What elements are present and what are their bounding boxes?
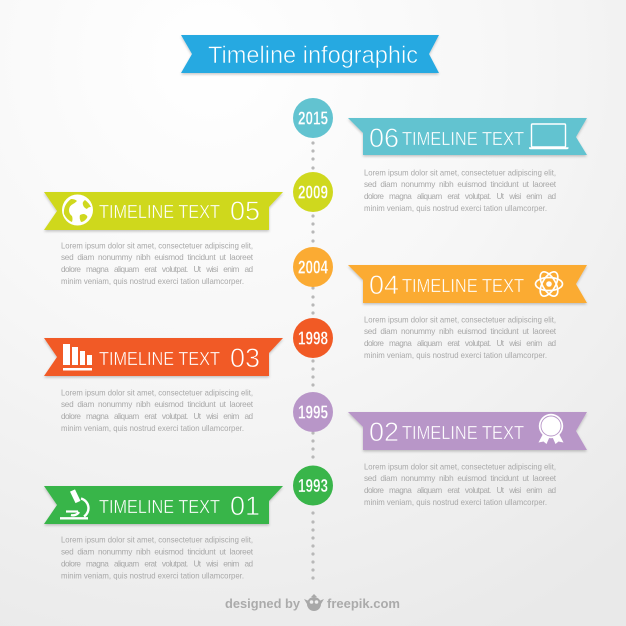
body text 04: sed diam nonummy nibh euismod tincidunt ut laoreet (364, 327, 557, 336)
year 2009 (293, 172, 333, 212)
body text 04: Lorem ipsum dolor sit amet, consectetuer adipiscing elit, (364, 316, 556, 324)
body text 04: minim veniam, quis nostrud exerci tation ullamcorper. (364, 351, 547, 360)
body text 04: dolore magna aliquam erat volutpat. Ut wisi enim ad (364, 339, 556, 348)
body text 01: Lorem ipsum dolor sit amet, consectetuer adipiscing elit, (61, 536, 253, 544)
body text 05: minim veniam, quis nostrud exerci tation ullamcorper. (61, 277, 244, 286)
body text 02 (364, 462, 557, 507)
year 2004 (293, 247, 333, 287)
body text 05: sed diam nonummy nibh euismod tincidunt ut laoreet (61, 253, 254, 262)
body text 05: dolore magna aliquam erat volutpat. Ut wisi enim ad (61, 265, 253, 274)
body text 02: minim veniam, quis nostrud exerci tation ullamcorper. (364, 498, 547, 507)
number 06: 06 (369, 123, 399, 153)
body text 02: dolore magna aliquam erat volutpat. Ut wisi enim ad (364, 486, 556, 495)
body text 03 (61, 388, 254, 433)
footer credit: designed by (225, 596, 301, 611)
heading 04: TIMELINE TEXT (402, 276, 524, 296)
body text 06: minim veniam, quis nostrud exerci tation ullamcorper. (364, 204, 547, 213)
title ribbon (181, 35, 439, 73)
year 1995 (293, 392, 333, 432)
icon: microscope (60, 490, 88, 518)
body text 01: sed diam nonummy nibh euismod tincidunt ut laoreet (61, 548, 254, 556)
icon: freepik mascot (304, 594, 324, 611)
year 2004: 2004 (298, 256, 329, 278)
icon: bar chart (63, 344, 92, 370)
number 01: 01 (230, 491, 260, 521)
year 2015: 2015 (298, 108, 328, 128)
year 1993 (293, 466, 333, 506)
number 02: 02 (369, 417, 399, 447)
title ribbon: Timeline infographic (208, 42, 418, 69)
year 1998: 1998 (298, 328, 328, 348)
year 1998 (293, 318, 333, 358)
body text 03: dolore magna aliquam erat volutpat. Ut wisi enim ad (61, 412, 253, 421)
ribbon 04 (348, 265, 587, 303)
body text 02: Lorem ipsum dolor sit amet, consectetuer adipiscing elit, (364, 462, 556, 472)
year 1995: 1995 (298, 402, 328, 422)
panel: 04 (348, 265, 587, 360)
body text 03: minim veniam, quis nostrud exerci tation ullamcorper. (61, 424, 244, 433)
panel: 02 (348, 412, 587, 507)
icon: atom (536, 269, 562, 299)
icon: award badge (538, 414, 564, 444)
icon: laptop (529, 124, 568, 149)
body text 01: minim veniam, quis nostrud exerci tation ullamcorper. (61, 572, 244, 580)
ribbon 05 (44, 192, 283, 230)
footer credit (225, 594, 400, 611)
number 03: 03 (230, 343, 260, 373)
icon: globe (62, 194, 93, 226)
year 1993: 1993 (298, 475, 328, 496)
ribbon 03 (44, 338, 283, 376)
panel: 01 (44, 486, 283, 580)
timeline dotted line (311, 141, 315, 580)
panel: 05 (44, 192, 283, 286)
body text 06 (364, 168, 557, 213)
body text 05: Lorem ipsum dolor sit amet, consectetuer adipiscing elit, (61, 242, 253, 250)
heading 01: TIMELINE TEXT (99, 497, 220, 517)
heading 02: TIMELINE TEXT (402, 423, 524, 443)
ribbon 01 (44, 486, 283, 524)
ribbon 06 (348, 118, 587, 155)
body text 02: sed diam nonummy nibh euismod tincidunt ut laoreet (364, 474, 557, 483)
heading 05: TIMELINE TEXT (99, 202, 220, 222)
body text 03: sed diam nonummy nibh euismod tincidunt ut laoreet (61, 400, 254, 409)
body text 06: dolore magna aliquam erat volutpat. Ut wisi enim ad (364, 192, 556, 201)
body text 06: Lorem ipsum dolor sit amet, consectetuer adipiscing elit, (364, 168, 556, 178)
footer credit: freepik.com (327, 596, 400, 611)
ribbon 02 (348, 412, 587, 450)
body text 01 (61, 536, 254, 580)
body text 06: sed diam nonummy nibh euismod tincidunt ut laoreet (364, 180, 557, 189)
heading 03: TIMELINE TEXT (99, 349, 220, 369)
number 05: 05 (230, 196, 260, 226)
year 2015 (293, 98, 333, 138)
panel: 03 (44, 338, 283, 433)
body text 05 (61, 242, 254, 286)
heading 06: TIMELINE TEXT (402, 129, 524, 149)
number 04: 04 (369, 270, 399, 300)
year 2009: 2009 (298, 182, 328, 202)
panel: 06 (348, 118, 587, 213)
body text 04 (364, 316, 557, 360)
body text 01: dolore magna aliquam erat volutpat. Ut wisi enim ad (61, 560, 253, 568)
body text 03: Lorem ipsum dolor sit amet, consectetuer adipiscing elit, (61, 388, 253, 398)
